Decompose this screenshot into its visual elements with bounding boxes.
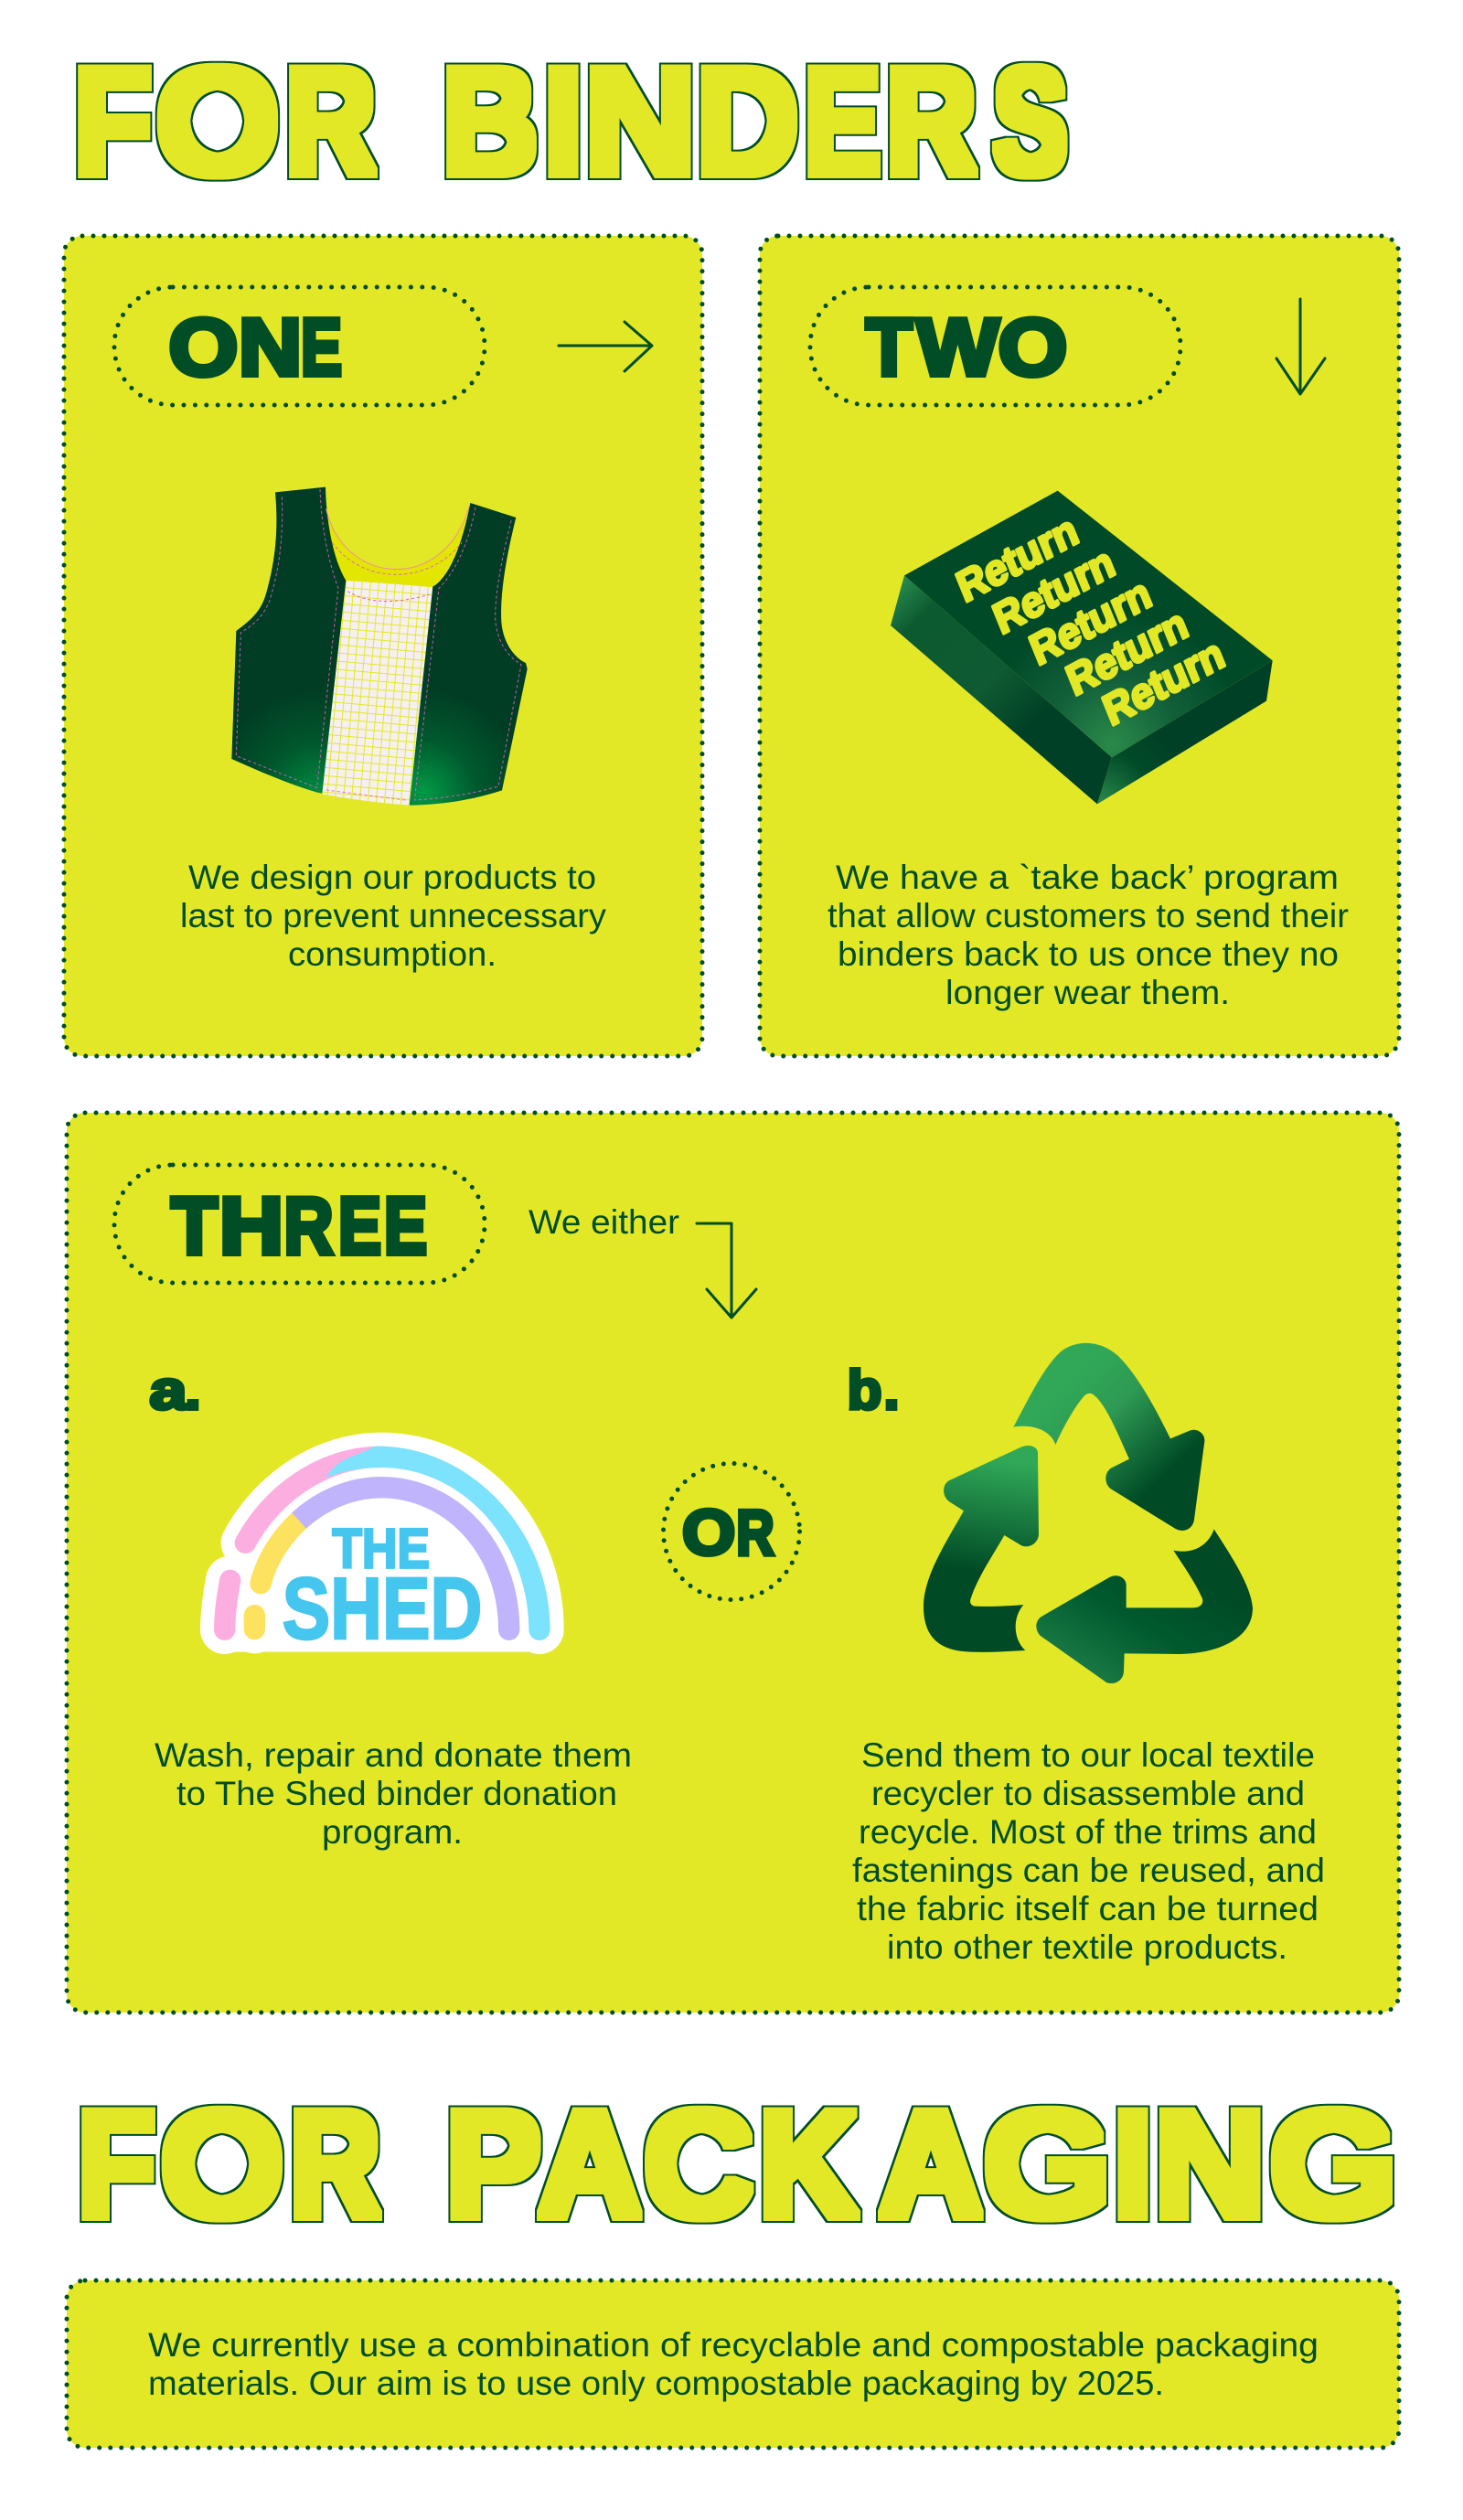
arrow: right — [559, 322, 652, 371]
logo: the shed rainbow — [225, 1447, 550, 1658]
body text: option b: recycle. Most of the trims and — [859, 1813, 1317, 1851]
step label: one — [114, 287, 485, 405]
step label: two: T — [866, 302, 913, 392]
icon: binder garment — [231, 487, 528, 806]
or badge: R — [736, 1497, 774, 1568]
title: for packaging: I — [1114, 2079, 1152, 2248]
body text: option a — [155, 1736, 632, 1851]
title: for binders: S — [994, 37, 1067, 205]
body text: packaging: We currently use a combination of recyclable and compostable packaging — [148, 2326, 1319, 2364]
logo text: the shed — [283, 1517, 482, 1658]
body text: step one: We design our products to — [188, 859, 596, 896]
option label: a: a — [150, 1360, 187, 1421]
title: for binders: O — [155, 37, 280, 205]
body text: step one: consumption. — [288, 935, 497, 973]
title: for packaging: O — [160, 2079, 284, 2248]
option label: b: . — [883, 1360, 900, 1421]
text: we either: We either — [529, 1203, 679, 1241]
step label: three — [114, 1165, 485, 1283]
step label: three: H — [219, 1180, 283, 1271]
body text: packaging: materials. Our aim is to use only compostable packaging by 2025. — [148, 2365, 1164, 2402]
option label: b: b — [847, 1360, 881, 1421]
body text: packaging — [148, 2326, 1319, 2402]
body text: step two: that allow customers to send their — [828, 897, 1349, 934]
step label: three: E — [338, 1180, 381, 1271]
body text: option b: the fabric itself can be turned — [857, 1890, 1319, 1927]
body text: option b: Send them to our local textile — [861, 1736, 1315, 1774]
title: for binders: B — [443, 37, 538, 205]
title: for packaging: A — [538, 2079, 642, 2248]
title: for packaging: P — [446, 2079, 541, 2248]
box label: return: Return — [1060, 599, 1194, 705]
step label: one: E — [301, 302, 342, 392]
icon: recycling symbol — [924, 1343, 1253, 1683]
step label: three: E — [384, 1180, 427, 1271]
step label: three: R — [283, 1180, 333, 1271]
body text: option b: into other textile products. — [887, 1928, 1287, 1966]
body text: option a: to The Shed binder donation — [176, 1775, 617, 1812]
step label: one: N — [239, 302, 302, 392]
step label: two: O — [998, 302, 1067, 392]
title: for binders: N — [584, 37, 697, 205]
body text: step two: binders back to us once they no — [838, 935, 1339, 973]
title: for binders: I — [543, 37, 583, 205]
option label: a: . — [185, 1360, 201, 1421]
title: for packaging: C — [644, 2079, 753, 2248]
title: for packaging: G — [1269, 2079, 1398, 2248]
body text: option b: fastenings can be reused, and — [852, 1852, 1325, 1889]
panel: packaging — [67, 2280, 1399, 2448]
box label: return: Return — [1096, 629, 1231, 735]
title: for binders: F — [75, 37, 152, 205]
title: for binders: D — [697, 37, 798, 205]
step label: one: O — [169, 302, 238, 392]
arrow: bent down — [697, 1223, 756, 1318]
arrow: down — [1276, 299, 1325, 394]
panel: step two — [760, 236, 1399, 1056]
body text: step two — [828, 859, 1349, 1011]
title: for binders: R — [285, 37, 375, 205]
title: for binders: E — [805, 37, 880, 205]
panel: step one — [64, 236, 702, 1056]
body text: step one: last to prevent unnecessary — [180, 897, 607, 934]
or badge — [664, 1463, 799, 1600]
or badge: O — [682, 1497, 735, 1568]
title: for packaging: N — [1154, 2079, 1265, 2248]
logo text: the shed: THE — [332, 1517, 430, 1580]
box label: return — [950, 506, 1231, 735]
icon: return box — [891, 491, 1273, 804]
step label: two — [810, 287, 1180, 405]
body text: option b: recycler to disassemble and — [871, 1775, 1305, 1812]
title: for packaging: F — [79, 2079, 155, 2248]
step label: three: T — [171, 1180, 218, 1271]
title: for packaging: A — [880, 2079, 982, 2248]
title: for packaging: K — [759, 2079, 857, 2248]
logo text: the shed: SHED — [283, 1561, 482, 1658]
body text: step two: We have a `take back’ program — [836, 859, 1339, 896]
title: for binders: R — [887, 37, 977, 205]
body text: option a: Wash, repair and donate them — [155, 1736, 632, 1774]
step label: two: W — [916, 302, 998, 392]
panel: step three — [67, 1113, 1399, 2013]
box label: return: Return — [950, 506, 1084, 612]
body text: step one — [180, 859, 607, 973]
body text: option a: program. — [322, 1813, 463, 1851]
box label: return: Return — [987, 538, 1121, 644]
title: for packaging: R — [291, 2079, 380, 2248]
body text: step two: longer wear them. — [945, 974, 1230, 1011]
box label: return: Return — [1023, 569, 1158, 675]
body text: option b — [852, 1736, 1325, 1966]
title: for packaging: G — [983, 2079, 1112, 2248]
